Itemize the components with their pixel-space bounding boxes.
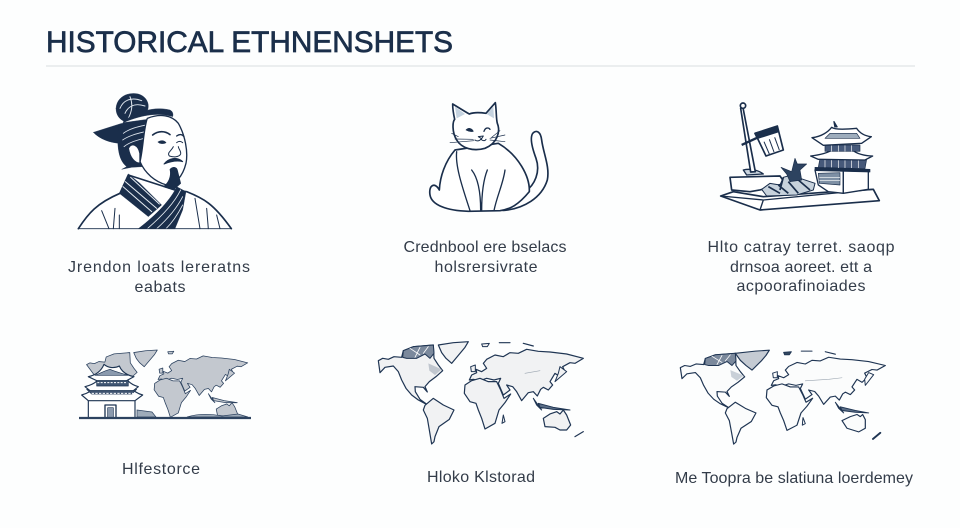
icon: cat xyxy=(430,103,548,211)
caption: world map A: Hloko Klstorad xyxy=(427,469,535,486)
caption: cat xyxy=(404,239,566,276)
panel: scholar portrait xyxy=(68,93,250,296)
icon: shoreline patches xyxy=(137,410,248,417)
caption: scholar: eabats xyxy=(134,279,186,296)
caption: monument: acpoorafinoiades xyxy=(736,278,866,295)
panel: monument xyxy=(708,103,895,295)
icon: pagoda xyxy=(82,364,143,418)
caption: monument: drnsoa aoreet. ett a xyxy=(730,259,872,276)
icon: pagoda and monument xyxy=(721,103,879,210)
chart: shaded world map xyxy=(87,350,248,418)
ground line xyxy=(79,417,251,419)
caption: monument xyxy=(708,239,895,295)
panel: world map A xyxy=(378,342,583,486)
chart: world map B xyxy=(680,350,885,444)
caption: monument: Hlto catray terret. saoqp xyxy=(708,239,895,256)
chart: world map A xyxy=(378,342,583,444)
panel: cat xyxy=(404,103,566,276)
panel: world map B xyxy=(675,350,913,487)
caption: scholar: Jrendon loats lereratns xyxy=(68,259,250,276)
title: HISTORICAL ETHNENSHETS xyxy=(46,26,453,59)
panel: pagoda with map xyxy=(79,350,251,478)
caption: cat: holsrersivrate xyxy=(434,259,538,276)
caption: scholar xyxy=(68,259,250,296)
caption: world map B: Me Toopra be slatiuna loerdemey xyxy=(675,470,913,487)
caption: cat: Crednbool ere bselacs xyxy=(404,239,566,256)
icon: scholar xyxy=(78,93,231,229)
caption: pagoda map: Hlfestorce xyxy=(122,461,200,478)
